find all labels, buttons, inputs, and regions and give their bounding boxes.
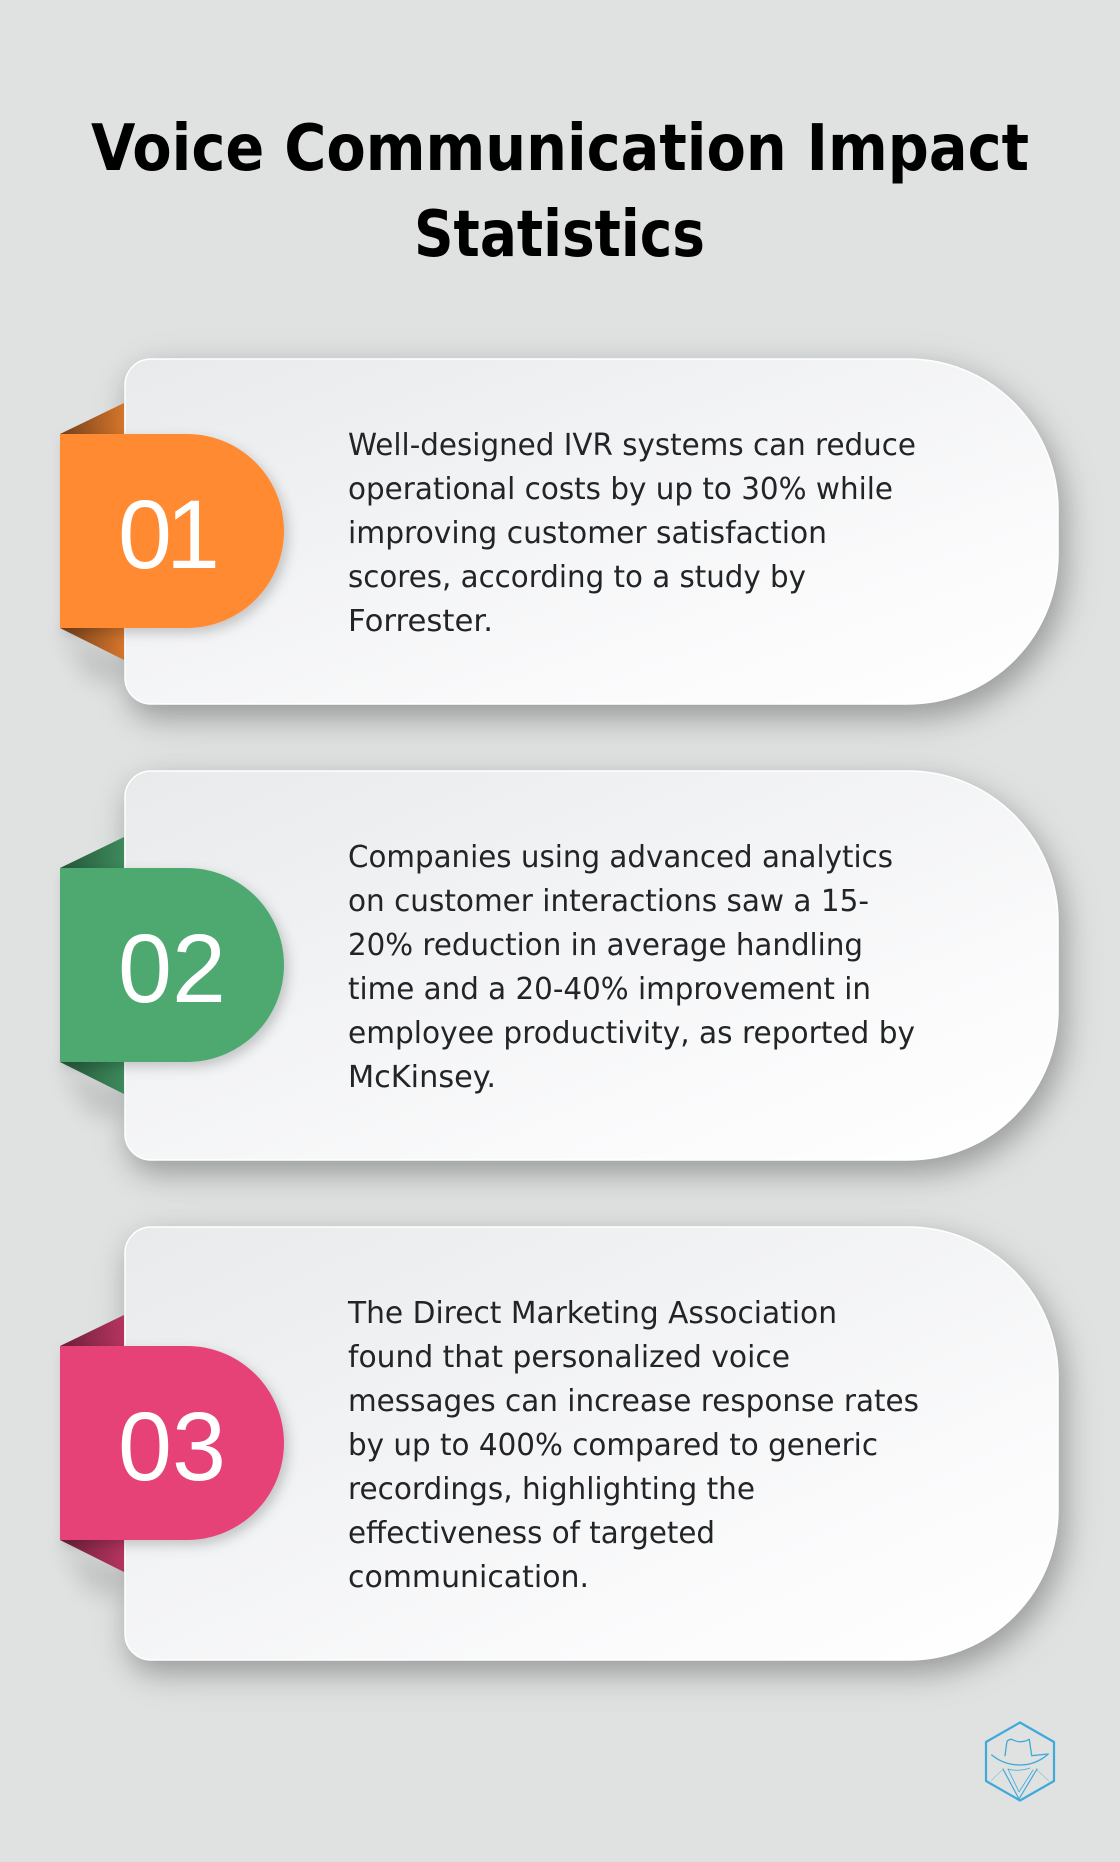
text block 01: Well-designed IVR systems can reduce [348,428,916,463]
card [125,771,1058,1160]
text block 02: Companies using advanced analytics [348,840,893,875]
text block 01 [348,428,916,639]
text block 01: scores, according to a study by [348,560,806,595]
number badge 02: 02 [118,914,226,1023]
text block 01: Forrester. [348,604,493,639]
text block 01: operational costs by up to 30% while [348,472,893,507]
title: Voice Communication Impact [91,112,1029,186]
card [125,1227,1058,1660]
panel: statistic 03 [60,1227,1064,1672]
ribbon fold: green [60,837,124,1094]
panel: statistic 01 [60,359,1064,717]
text block 03: by up to 400% compared to generic [348,1428,878,1463]
text block 02: on customer interactions saw a 15- [348,884,869,919]
text block 02: 20% reduction in average handling [348,928,863,963]
number badge 02 [60,868,284,1062]
number badge 03 [60,1346,284,1540]
text block 03: The Direct Marketing Association [347,1296,837,1331]
text block 03: communication. [348,1560,589,1595]
text block 02: employee productivity, as reported by [348,1016,915,1051]
text block 02: McKinsey. [348,1060,496,1095]
text block 03 [347,1296,919,1595]
number badge 01: 01 [118,480,220,589]
number badge 03: 03 [118,1392,226,1501]
text block 03: messages can increase response rates [348,1384,919,1419]
text block 02 [348,840,915,1095]
title: Statistics [414,198,705,272]
ribbon fold: orange [60,403,124,660]
text block 02: time and a 20-40% improvement in [348,972,871,1007]
panel: statistic 02 [60,771,1064,1172]
title [91,112,1029,272]
text block 03: recordings, highlighting the [348,1472,755,1507]
text block 01: improving customer satisfaction [348,516,827,551]
text block 03: found that personalized voice [348,1340,790,1375]
ribbon fold: pink [60,1315,124,1572]
number badge 01 [60,434,284,628]
text block 03: effectiveness of targeted [348,1516,715,1551]
card [125,359,1058,704]
icon: hexagon logo with hat [986,1722,1054,1800]
